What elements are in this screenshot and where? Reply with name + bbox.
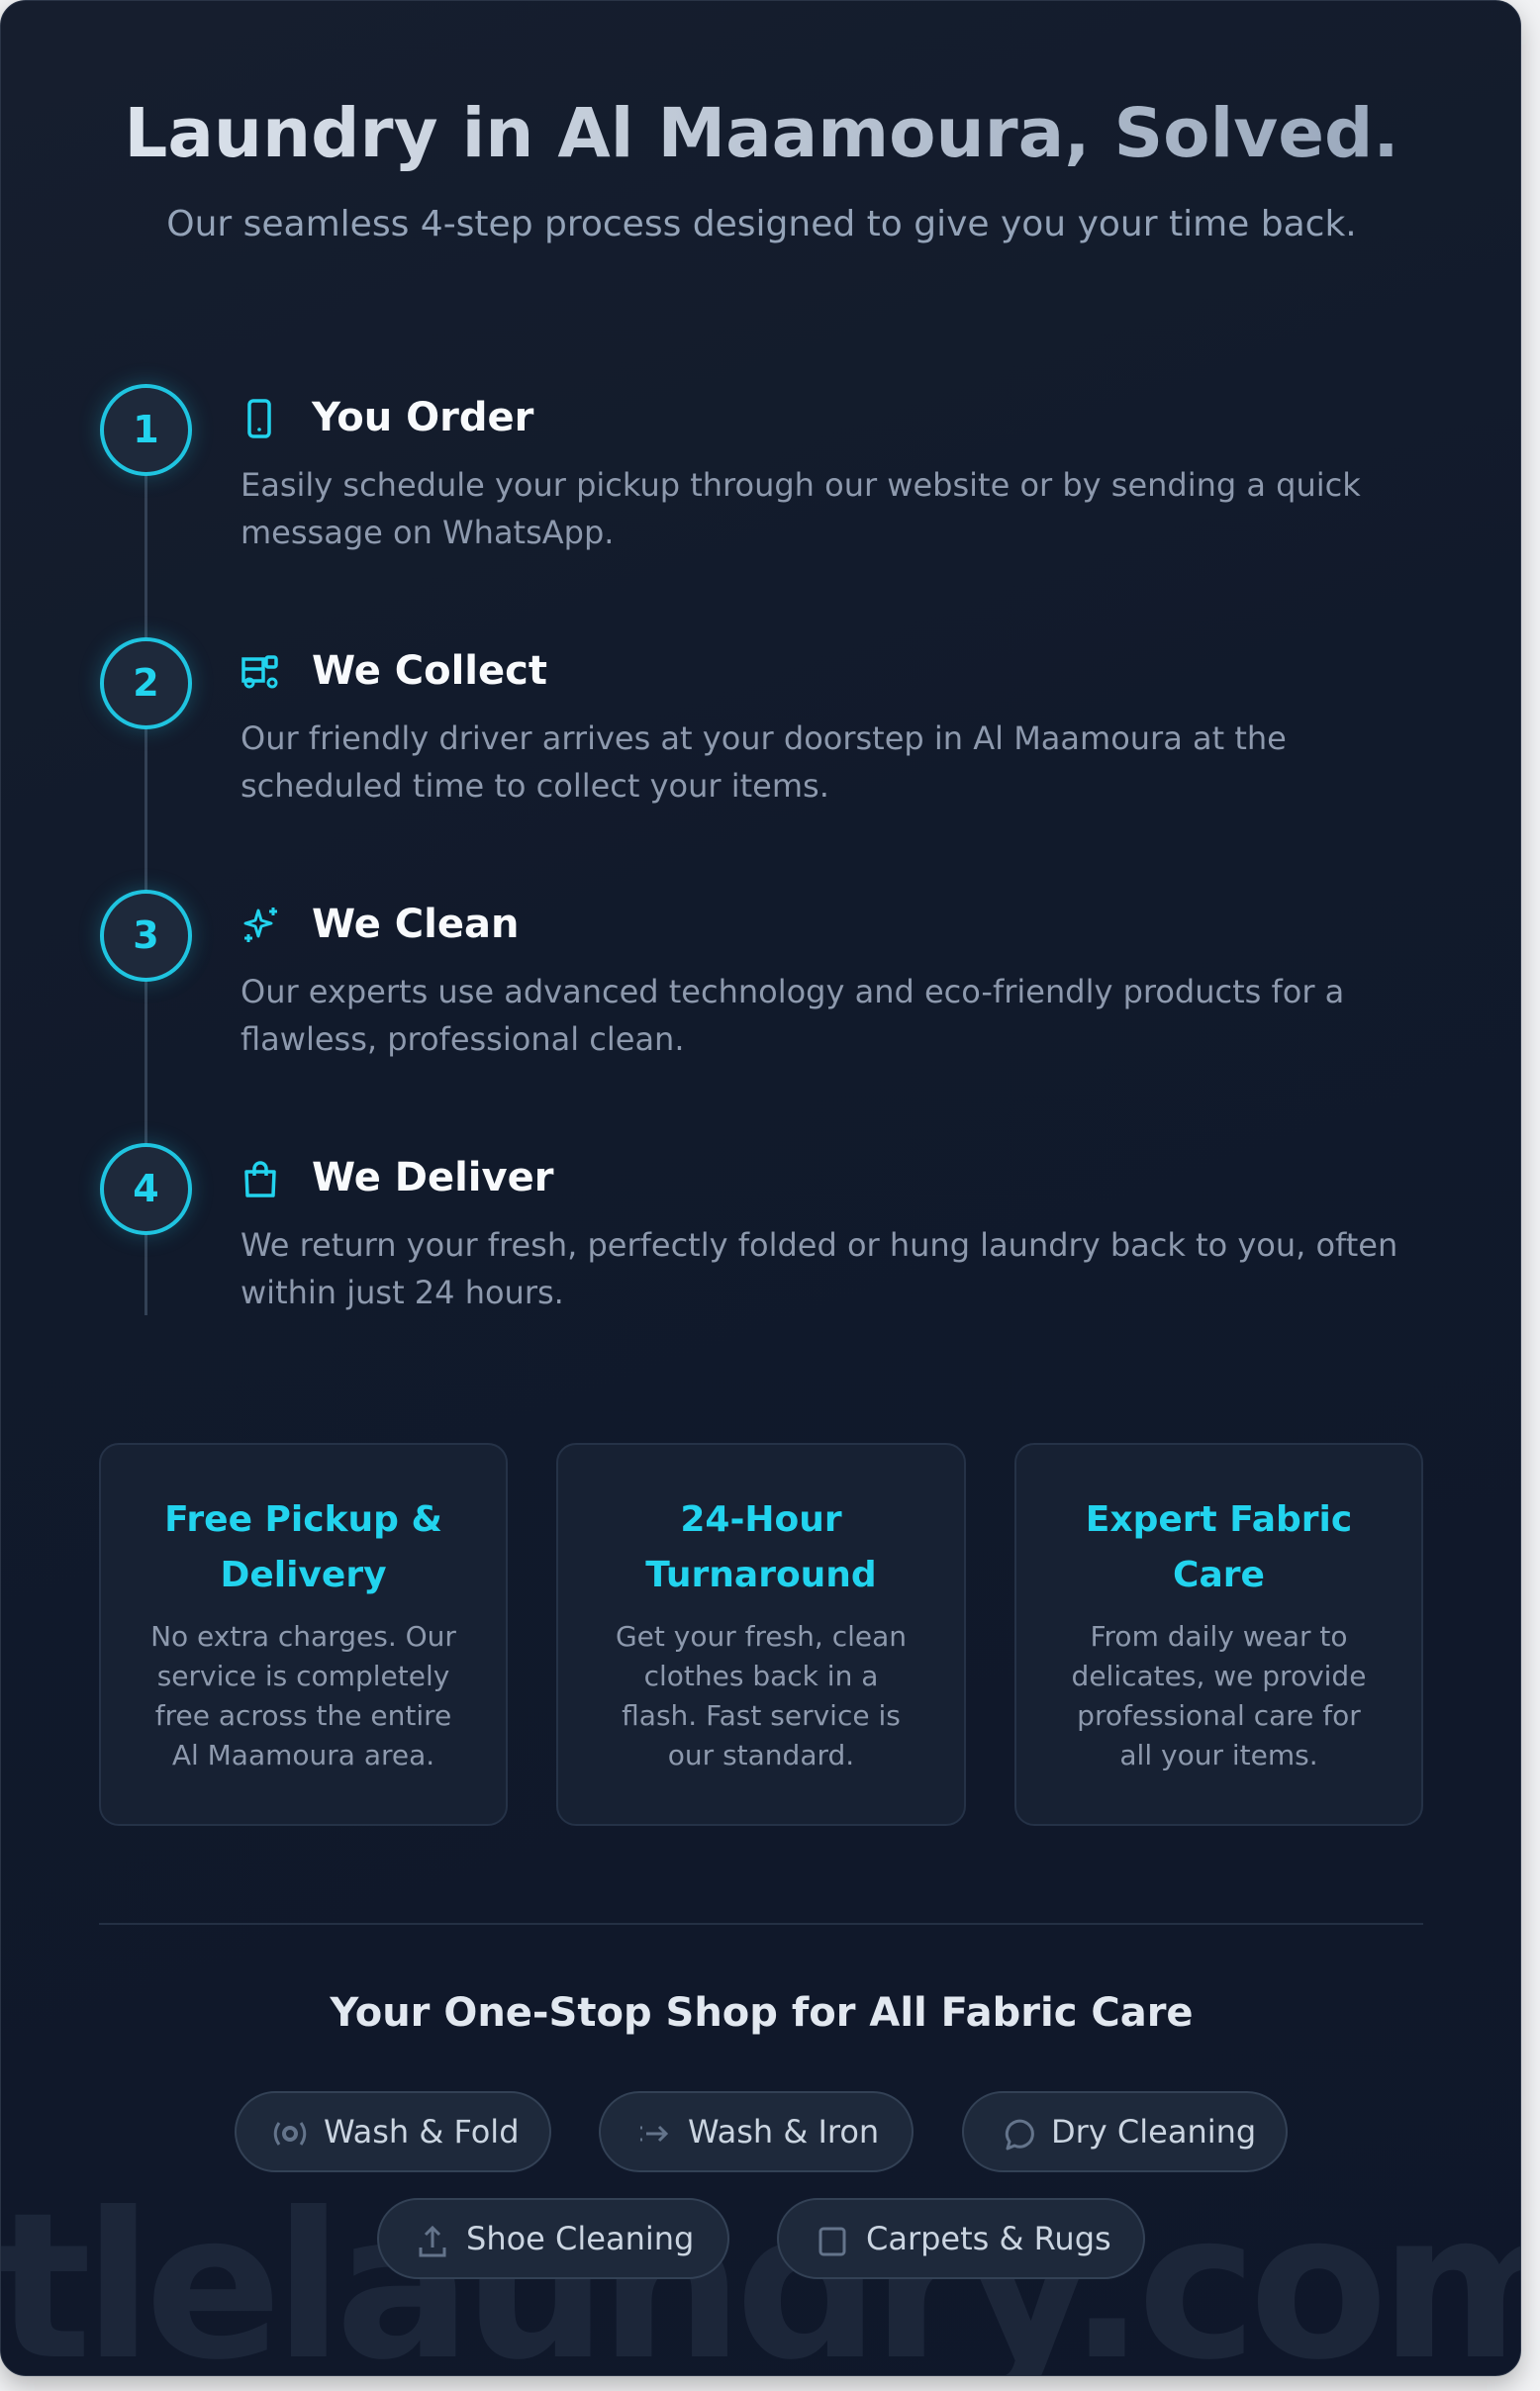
feature text: From daily wear to delicates, we provide professional care for all your items. — [1072, 1620, 1366, 1771]
step 1 number — [100, 384, 192, 476]
step 3 — [241, 902, 1344, 1058]
pill: shoe cleaning: Shoe Cleaning — [466, 2220, 694, 2257]
step 4 — [241, 1155, 1397, 1311]
timeline line — [144, 430, 147, 1315]
feature title: Free Pickup & Delivery — [164, 1499, 442, 1595]
title: Laundry in Al Maamoura, Solved. — [124, 94, 1399, 173]
feature title: Expert Fabric Care — [1086, 1499, 1352, 1595]
step 3 number — [100, 890, 192, 982]
step 2 text: Our friendly driver arrives at your doorstep in Al Maamoura at the scheduled time to collect your items. — [241, 719, 1287, 805]
step 4 number: 4 — [133, 1167, 159, 1210]
feature text: No extra charges. Our service is completely free across the entire Al Maamoura area. — [150, 1620, 456, 1771]
step 2 heading: We Collect — [312, 648, 547, 694]
step 2 number: 2 — [133, 661, 159, 705]
pill: wash & iron — [599, 2091, 914, 2172]
pill: dry cleaning: Dry Cleaning — [1051, 2113, 1256, 2151]
pill: dry cleaning — [962, 2091, 1288, 2172]
step 3 heading: We Clean — [312, 902, 519, 947]
step 4 number — [100, 1143, 192, 1235]
step 4 heading: We Deliver — [312, 1155, 553, 1200]
feature: free pickup — [99, 1443, 508, 1826]
step 1 number: 1 — [133, 408, 159, 451]
step 2 — [241, 648, 1287, 805]
feature: expert care — [1014, 1443, 1423, 1826]
step 2 number — [100, 637, 192, 729]
step 1 text: Easily schedule your pickup through our website or by sending a quick message on WhatsApp. — [241, 466, 1361, 551]
step 3 text: Our experts use advanced technology and eco-friendly products for a flawless, professional clean. — [241, 973, 1344, 1058]
pill: wash & fold — [235, 2091, 551, 2172]
step 4 text: We return your fresh, perfectly folded or hung laundry back to you, often within just 24 hours. — [241, 1226, 1397, 1311]
pill: shoe cleaning — [377, 2198, 729, 2279]
services heading: Your One-Stop Shop for All Fabric Care — [330, 1990, 1194, 2036]
pill: wash & iron: Wash & Iron — [688, 2113, 879, 2151]
step 1 — [241, 395, 1361, 551]
pill: carpets: Carpets & Rugs — [866, 2220, 1111, 2257]
pill: wash & fold: Wash & Fold — [324, 2113, 519, 2151]
feature: 24-hour — [556, 1443, 966, 1826]
feature text: Get your fresh, clean clothes back in a flash. Fast service is our standard. — [616, 1620, 907, 1771]
pill: carpets — [777, 2198, 1145, 2279]
subtitle: Our seamless 4-step process designed to give you your time back. — [166, 204, 1357, 244]
step 3 number: 3 — [133, 913, 159, 957]
feature title: 24-Hour Turnaround — [645, 1499, 877, 1595]
step 1 heading: You Order — [312, 395, 533, 440]
